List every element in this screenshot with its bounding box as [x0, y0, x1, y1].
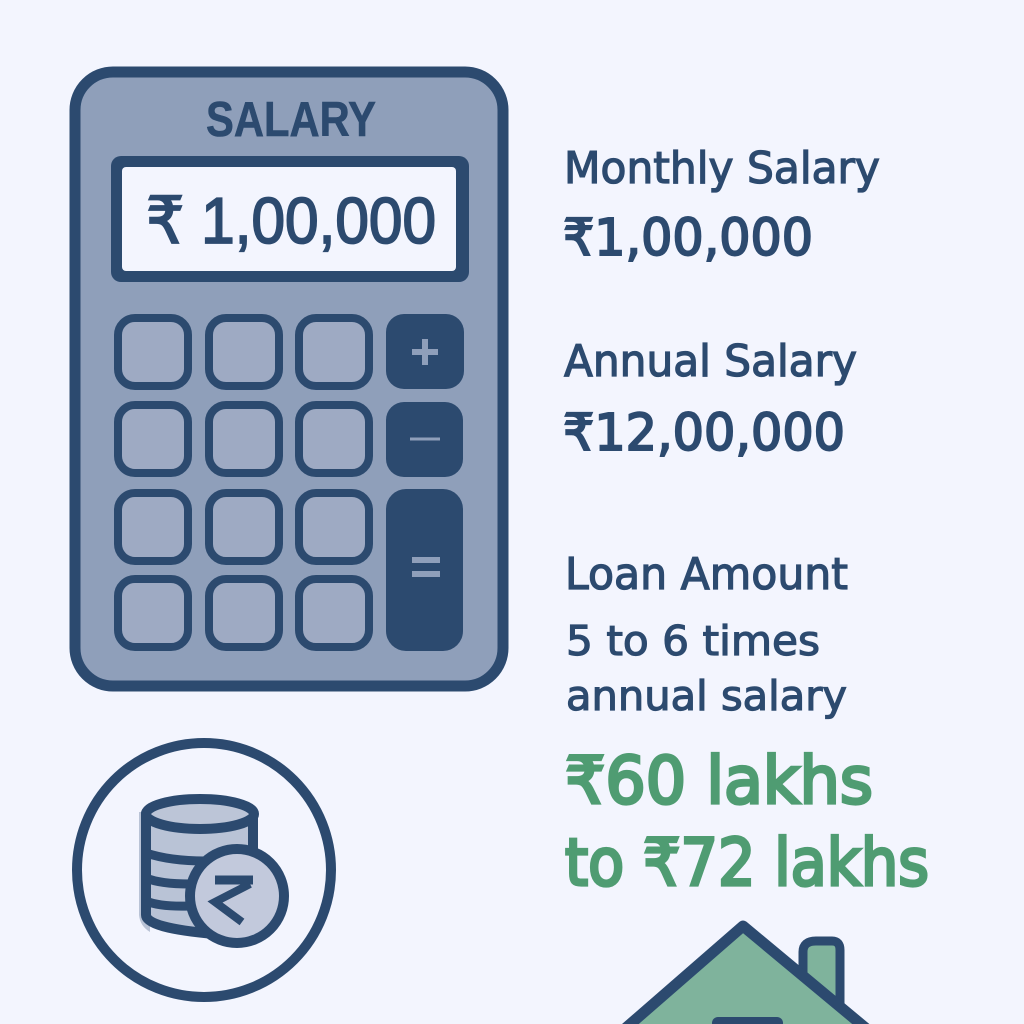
- loan multiple text: annual salary: [566, 672, 847, 720]
- loan range in green: ₹60 lakhs: [565, 744, 873, 819]
- coin stack: [139, 799, 254, 934]
- calculator: [75, 72, 503, 686]
- loan range in green: [565, 744, 929, 901]
- monthly salary value: ₹1,00,000: [563, 209, 813, 268]
- loan multiple text: [566, 617, 847, 720]
- minus key: [386, 402, 463, 477]
- icon: house: [612, 926, 880, 1024]
- calculator display: [111, 156, 469, 282]
- equals key: [386, 489, 463, 651]
- calculator display: ₹ 1,00,000: [146, 184, 436, 257]
- number keys: [118, 318, 369, 647]
- loan multiple text: 5 to 6 times: [566, 617, 820, 665]
- calculator body: [75, 72, 503, 686]
- loan amount label: Loan Amount: [565, 549, 848, 600]
- icon: coins in circle: [77, 743, 331, 997]
- plus key: [386, 314, 464, 389]
- rupee coin: [190, 849, 284, 943]
- calculator title: SALARY: [206, 93, 376, 147]
- annual salary value: ₹12,00,000: [563, 404, 845, 463]
- loan range in green: to ₹72 lakhs: [565, 826, 929, 901]
- monthly salary label: Monthly Salary: [564, 143, 880, 194]
- annual salary label: Annual Salary: [564, 336, 857, 387]
